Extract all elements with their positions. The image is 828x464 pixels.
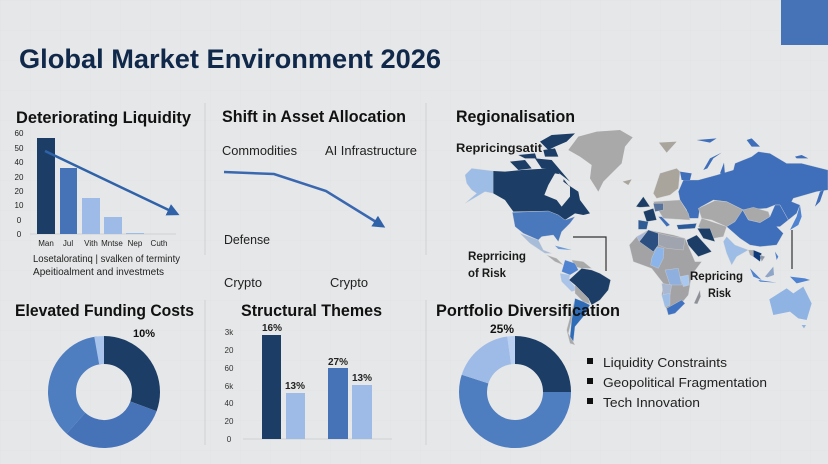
bar chart: liquidity: 10: [15, 201, 24, 210]
bar chart: liquidity: Nep: [128, 239, 143, 248]
line chart: asset allocation: AI Infrastructure: [325, 144, 417, 158]
bar chart: structural themes: 40: [225, 399, 234, 408]
liquidity caption: Losetaloratinq | svalken of terminty: [33, 253, 181, 265]
donut chart: portfolio: 25%: [490, 322, 514, 336]
line chart: asset allocation: Commodities: [222, 144, 297, 158]
legend list: [587, 355, 767, 410]
Greenland: [568, 130, 677, 192]
donut chart: portfolio: [462, 322, 568, 445]
bar chart: liquidity: [15, 129, 176, 248]
liquidity caption: [33, 253, 181, 278]
bar chart: structural themes: 13%: [352, 373, 372, 384]
bar chart: liquidity: 0: [17, 216, 22, 225]
map labels: of Risk: [468, 266, 506, 280]
donut chart: funding costs: [45, 328, 163, 451]
bar chart: structural themes: 0: [227, 435, 232, 444]
map labels: Risk: [708, 286, 731, 300]
bar chart: structural themes: 20: [225, 417, 234, 426]
line chart: asset allocation: Defense: [224, 233, 270, 247]
line chart: asset allocation: Crypto: [224, 276, 262, 290]
bar chart: structural themes: 3k: [225, 328, 234, 337]
donut chart: funding costs: 10%: [133, 328, 155, 340]
bar chart: liquidity: Vith: [84, 239, 98, 248]
title: Global Market Environment 2026: [19, 44, 441, 74]
bar chart: structural themes: 13%: [285, 381, 305, 392]
bar chart: liquidity: 20: [15, 173, 24, 182]
map labels: Repricing: [690, 269, 743, 283]
bar chart: liquidity: 0: [17, 230, 22, 239]
line chart: asset allocation: Crypto: [330, 276, 368, 290]
bar chart: structural themes: 27%: [328, 357, 348, 368]
world map: [465, 130, 828, 345]
map labels: Repricingsatit: [456, 141, 542, 155]
trend arrow: [45, 151, 175, 213]
section heading: structural themes: Structural Themes: [241, 301, 382, 320]
Eurasia: [636, 138, 828, 257]
bar chart: liquidity: Cuth: [151, 239, 167, 248]
bar chart: liquidity: Mntse: [101, 239, 123, 248]
map labels: [456, 141, 743, 300]
section heading: asset allocation: Shift in Asset Allocation: [222, 107, 406, 126]
bar chart: liquidity: Jul: [63, 239, 73, 248]
liquidity caption: Apeitioalment and investmets: [33, 266, 164, 278]
section heading: portfolio diversification: Portfolio Diversification: [436, 301, 620, 320]
bar chart: liquidity: Man: [38, 239, 54, 248]
bar chart: structural themes: 6k: [225, 382, 234, 391]
legend list: Geopolitical Fragmentation: [603, 375, 767, 390]
corner accent block: [781, 0, 828, 45]
legend list: Liquidity Constraints: [603, 355, 728, 370]
bar chart: liquidity: 50: [15, 144, 24, 153]
section heading: regionalisation: Regionalisation: [456, 107, 575, 126]
Latin America: [547, 255, 611, 345]
Africa, South Asia and Oceania: [629, 230, 812, 328]
bar chart: structural themes: [225, 323, 392, 444]
section heading: liquidity: Deteriorating Liquidity: [16, 108, 192, 127]
bar chart: structural themes: 16%: [262, 323, 282, 334]
bar chart: structural themes: 60: [225, 364, 234, 373]
legend list: Tech Innovation: [603, 395, 700, 410]
bar chart: liquidity: 60: [15, 129, 24, 138]
section heading: funding costs: Elevated Funding Costs: [15, 301, 194, 320]
line chart: asset allocation: [222, 144, 417, 290]
bar chart: liquidity: 20: [15, 187, 24, 196]
bar chart: structural themes: 20: [225, 346, 234, 355]
North America: [465, 133, 590, 253]
callout lines: [573, 230, 792, 271]
map labels: Reprricing: [468, 249, 526, 263]
bar chart: liquidity: 40: [15, 158, 24, 167]
